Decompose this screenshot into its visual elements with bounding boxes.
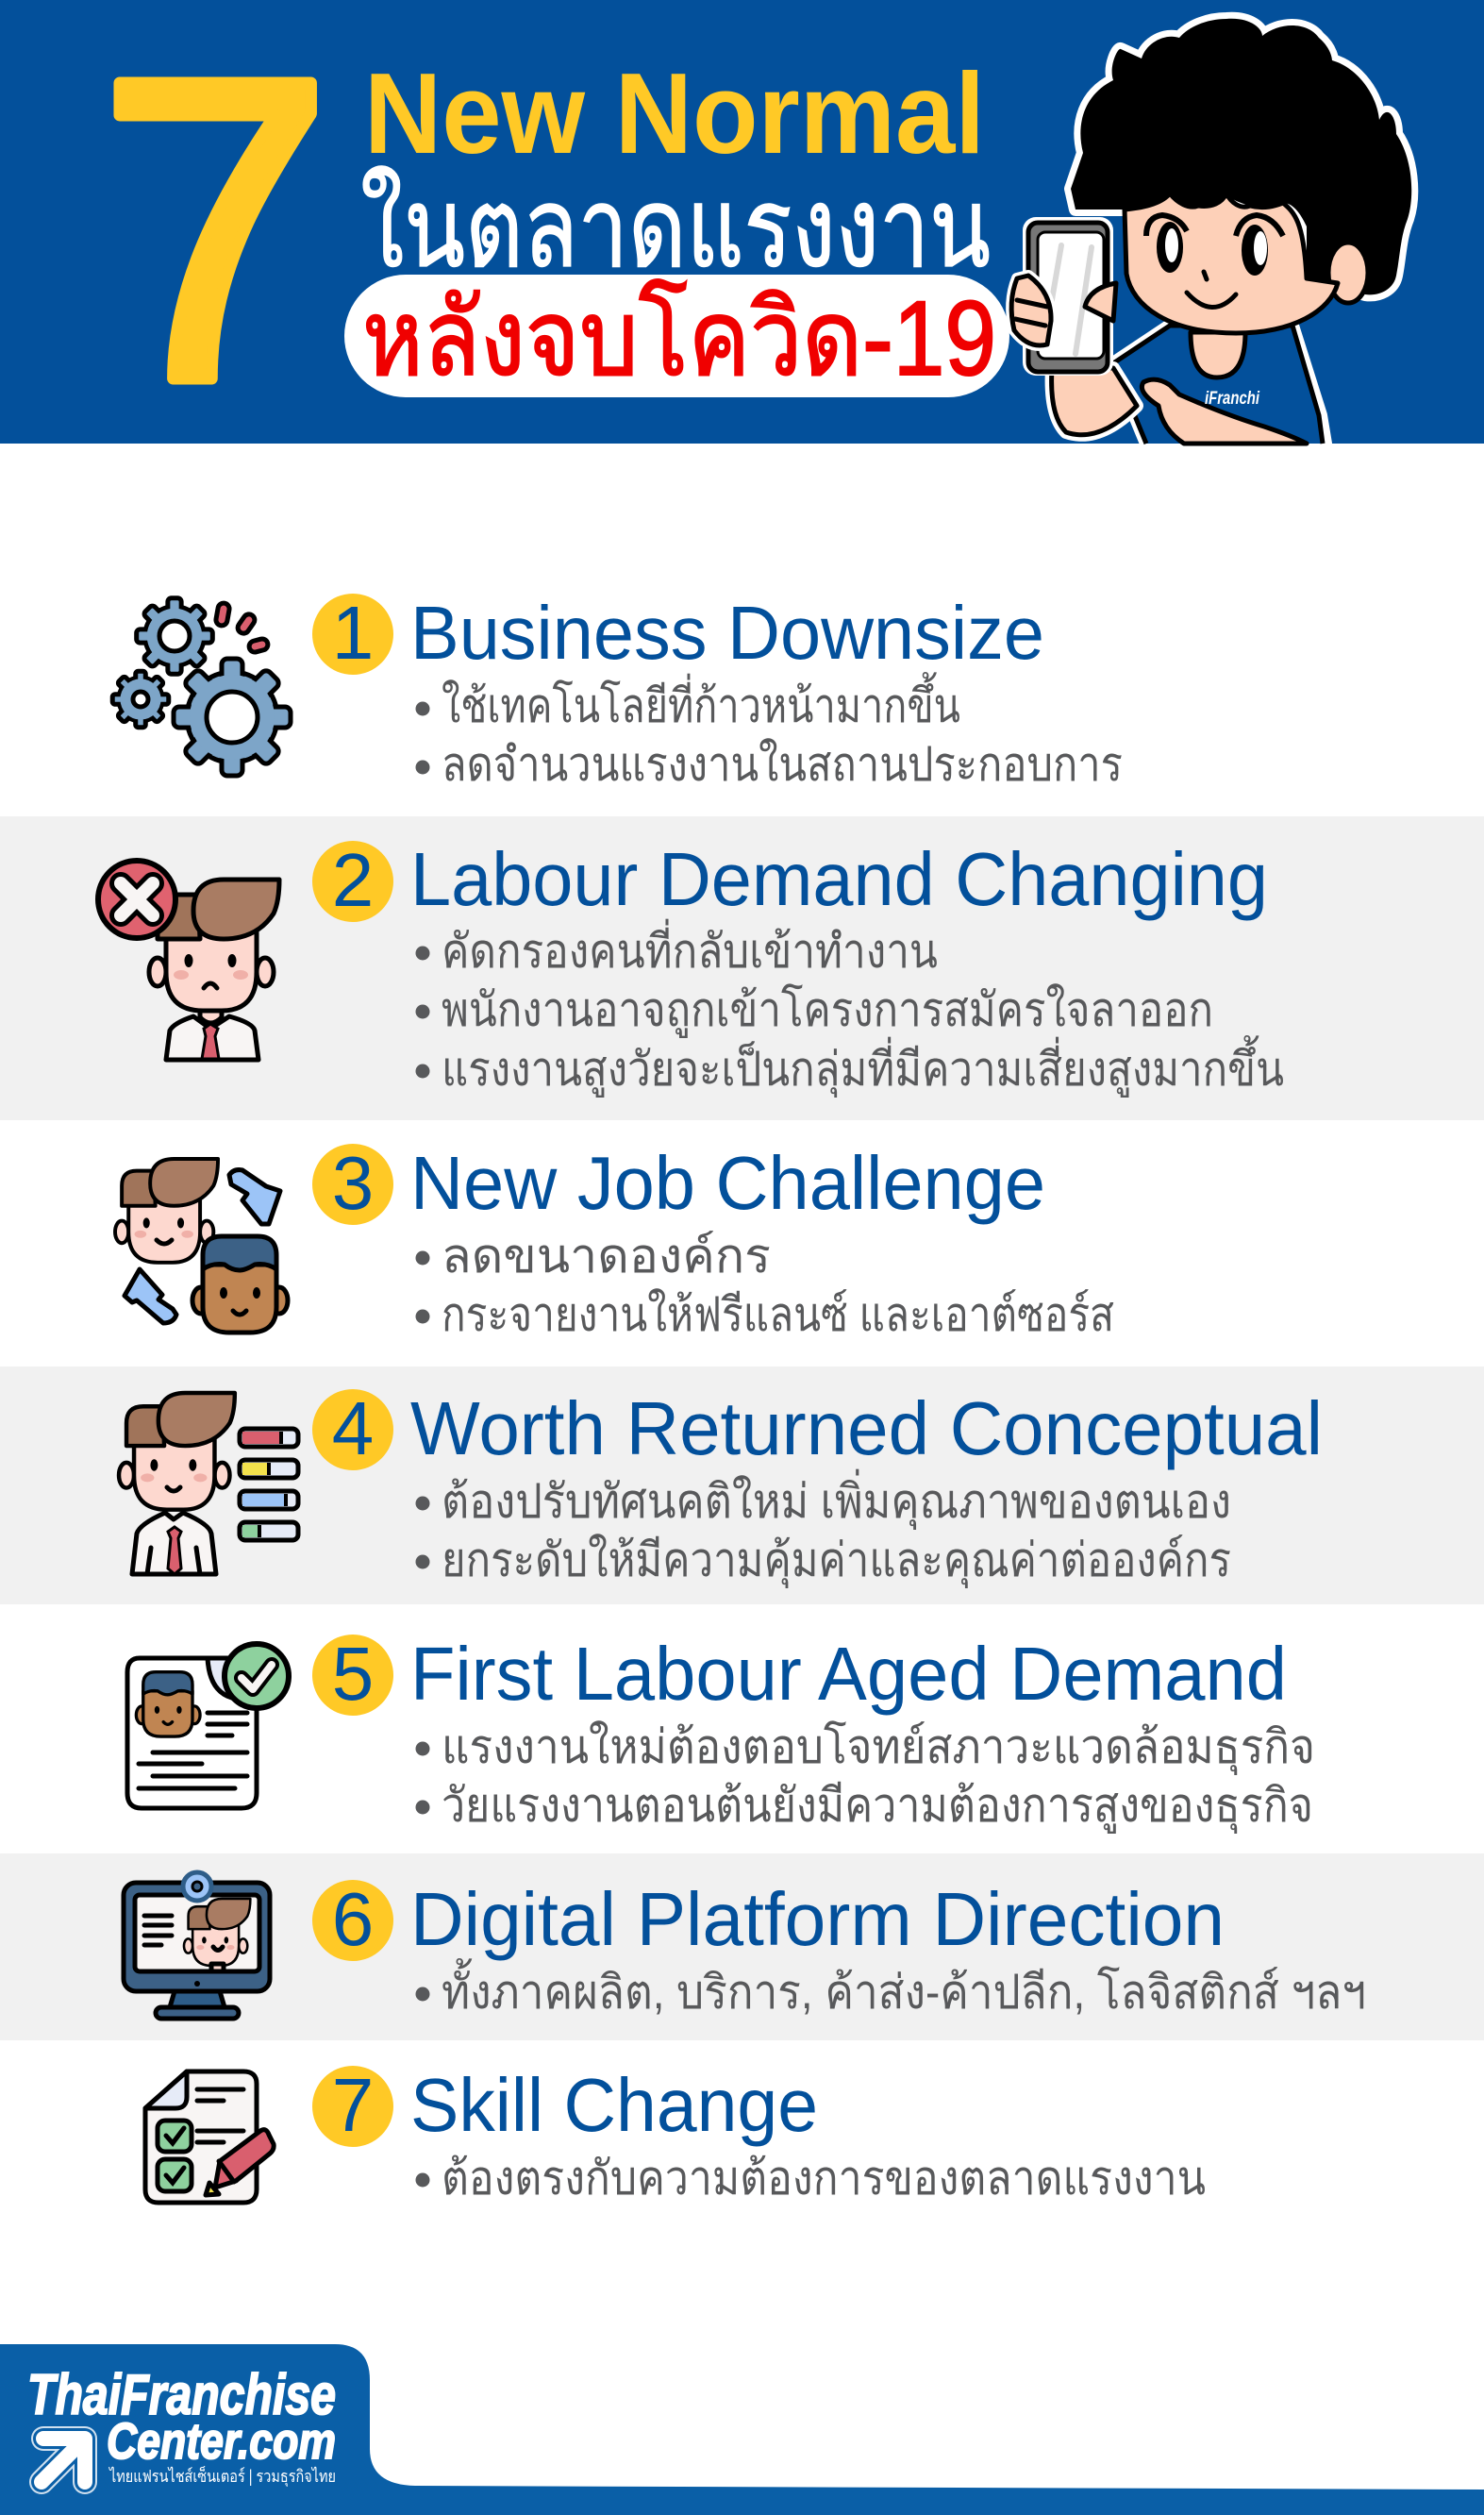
bullet list: ต้องตรงกับความต้องการของตลาดแรงงาน <box>442 2152 1206 2205</box>
title: New Normal: New Normal <box>364 49 985 177</box>
shirt lettering: iFranchi <box>1205 389 1260 409</box>
header banner <box>0 0 1484 470</box>
heading: New Job Challenge <box>410 1141 1045 1225</box>
number badge 1: 1 <box>332 591 374 675</box>
number badge 2: 2 <box>332 838 374 922</box>
logo wordmark line 2: Center.com <box>107 2413 336 2470</box>
icon: two people swapping <box>115 1159 288 1333</box>
pointing hand <box>1142 379 1307 444</box>
bullet list: กระจายงานให้ฟรีแลนซ์ และเอาต์ซอร์ส <box>442 1288 1114 1341</box>
bullet list <box>415 1230 1114 1341</box>
bullet list: คัดกรองคนที่กลับเข้าทำงาน <box>442 919 938 978</box>
icon: checklist and pen <box>145 2071 274 2203</box>
bullet list: วัยแรงงานตอนต้นยังมีความต้องการสูงของธุรกิจ <box>442 1779 1313 1834</box>
number badge 6 <box>312 1877 393 1961</box>
bullet list: แรงงานสูงวัยจะเป็นกลุ่มที่มีความเสี่ยงสูงมากขึ้น <box>442 1035 1284 1098</box>
hair <box>1071 19 1411 294</box>
heading: Digital Platform Direction <box>410 1877 1225 1961</box>
character mascot with phone <box>1011 19 1411 444</box>
face <box>1125 193 1338 333</box>
bullet list: พนักงานอาจถูกเข้าโครงการสมัครใจลาออก <box>442 983 1213 1038</box>
heading: Worth Returned Conceptual <box>410 1386 1323 1470</box>
heading: Labour Demand Changing <box>410 837 1268 921</box>
icon: monitor video call <box>124 1872 270 2019</box>
icon: resume with check badge <box>127 1644 289 1808</box>
number badge 5: 5 <box>332 1632 374 1716</box>
row 1: Business Downsize <box>112 591 1123 791</box>
heading: Skill Change <box>410 2063 818 2147</box>
number badge 3 <box>312 1141 393 1225</box>
heading: First Labour Aged Demand <box>410 1632 1287 1716</box>
ear <box>1328 243 1368 303</box>
bullet list <box>415 1469 1231 1588</box>
number badge 4 <box>312 1386 393 1470</box>
row 3: New Job Challenge <box>115 1141 1114 1341</box>
phone <box>1023 217 1113 376</box>
bullet list <box>415 1720 1315 1834</box>
eyes <box>1146 215 1283 276</box>
number badge 6: 6 <box>332 1877 374 1961</box>
row 4: Worth Returned Conceptual <box>0 1366 1484 1604</box>
nose and smile <box>1187 272 1236 308</box>
bullet list: ต้องปรับทัศนคติใหม่ เพิ่มคุณภาพของตนเอง <box>442 1469 1231 1530</box>
row 6: Digital Platform Direction <box>0 1853 1484 2040</box>
logo wordmark line 1: ThaiFranchise <box>27 2363 336 2426</box>
number badge 1 <box>312 591 393 675</box>
bullet list: ยกระดับให้มีความคุ้มค่าและคุณค่าต่อองค์กร <box>442 1534 1231 1588</box>
bullet list <box>415 919 1284 1098</box>
number badge 7 <box>312 2063 393 2147</box>
big number 7: 7 <box>98 0 332 470</box>
fingers <box>1011 276 1051 345</box>
icon: gears <box>112 598 291 776</box>
title: Thai labour market: ในตลาดแรงงาน <box>360 166 991 291</box>
logo arrow icon <box>42 2439 85 2482</box>
bullet list: ลดจำนวนแรงงานในสถานประกอบการ <box>442 738 1123 791</box>
number badge 5 <box>312 1632 393 1716</box>
subtitle pill: หลังจบโควิด-19 <box>362 279 996 397</box>
bullet list <box>415 672 1123 791</box>
heading: Business Downsize <box>410 591 1044 675</box>
number badge 4: 4 <box>332 1386 374 1470</box>
bullet list: ทั้งภาคผลิต, บริการ, ค้าส่ง-ค้าปลีก, โลจิสติกส์ ฯลฯ <box>442 1958 1366 2019</box>
row 2: Labour Demand Changing <box>0 816 1484 1120</box>
bullet list: ลดขนาดองค์กร <box>442 1230 771 1283</box>
footer logo <box>0 2344 1484 2515</box>
body and arm <box>1113 326 1326 444</box>
bullet list: ใช้เทคโนโลยีที่ก้าวหน้ามากขึ้น <box>442 672 960 732</box>
icon: man with skill bars <box>119 1393 298 1574</box>
row 5: First Labour Aged Demand <box>127 1632 1315 1834</box>
logo tagline: ไทยแฟรนไชส์เซ็นเตอร์ | รวมธุรกิจไทย <box>108 2465 336 2487</box>
number badge 7: 7 <box>332 2063 374 2147</box>
icon: worried man with X badge <box>98 861 279 1060</box>
number badge 3: 3 <box>332 1141 374 1225</box>
row 7: Skill Change <box>145 2063 1206 2205</box>
number badge 2 <box>312 838 393 922</box>
bullet list: แรงงานใหม่ต้องตอบโจทย์สภาวะแวดล้อมธุรกิจ <box>442 1720 1315 1775</box>
